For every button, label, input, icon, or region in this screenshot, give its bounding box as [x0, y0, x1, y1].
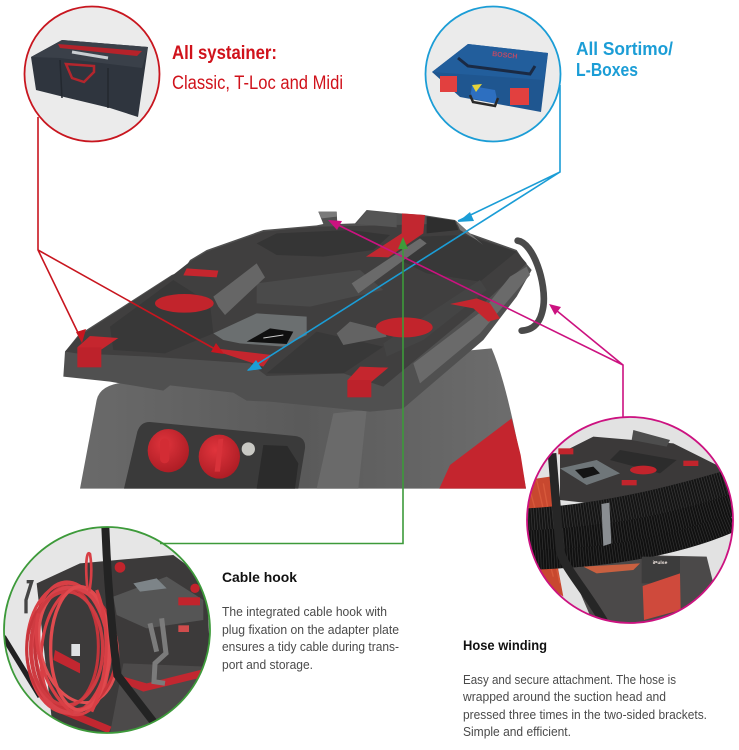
connector: green line and arrow: [160, 237, 408, 544]
cable hook tab: [318, 212, 337, 218]
black handle: [552, 453, 605, 623]
hose bracket: [518, 241, 544, 331]
heading: All systainer: [172, 43, 343, 94]
control panel: [124, 422, 305, 489]
heading: All systainer: Classic, T-Loc and Midi: [172, 73, 343, 94]
red lock: front right: [347, 367, 388, 397]
connector: red lines and arrows: [38, 117, 224, 354]
icon: blue L-Boxx case: BOSCH: [492, 51, 518, 61]
connector: magenta lines and arrows: [328, 220, 623, 417]
vacuum body: [80, 348, 526, 489]
text block: Cable hook: Cable hook: [222, 569, 297, 585]
text block: Hose winding: Easy and secure attachment. The hose is: [463, 672, 676, 687]
text block: Hose winding: wrapped around the suction head and: [462, 689, 666, 704]
corrugated hose: [523, 482, 733, 560]
red side panel: [439, 418, 526, 489]
circle: L-Boxx: [426, 6, 560, 142]
heading: All Sortimo/L-Boxes: L-Boxes: [576, 60, 638, 80]
circle: hose winding: [523, 417, 733, 623]
text block: Hose winding: Hose winding: [463, 637, 547, 653]
black handle: [105, 527, 153, 722]
heading: All Sortimo/L-Boxes: [576, 39, 673, 80]
connector: blue lines and arrows: [247, 85, 560, 371]
product: vacuum with adapter plate: [63, 210, 544, 489]
text block: Cable hook: ensures a tidy cable during trans-: [222, 639, 399, 654]
rotary knob right: [199, 435, 240, 479]
central opening: [213, 313, 307, 347]
red lock: back centre: [366, 213, 425, 257]
red lock: front left: [77, 336, 118, 367]
gray bracket: [601, 503, 611, 546]
power socket: [257, 445, 298, 489]
text block: Hose winding: [462, 637, 707, 739]
red cable coil: [27, 553, 128, 718]
service label: [642, 557, 680, 583]
text block: Cable hook: port and storage.: [222, 657, 313, 672]
text block: Hose winding: Simple and efficient.: [463, 724, 571, 739]
raised ridges: [213, 263, 265, 315]
heading: All systainer: All systainer:: [172, 43, 277, 64]
circle: systainer: [24, 6, 160, 142]
photo: hose wound around vacuum: iPulse: [653, 560, 668, 566]
red service flap: [643, 573, 681, 620]
adapter plate: [63, 210, 544, 412]
red lock: right: [450, 298, 500, 322]
gray cable bracket: [150, 618, 166, 683]
text block: Cable hook: plug fixation on the adapter plate: [222, 622, 399, 637]
photo: cable coiled on hook: [3, 527, 213, 733]
red lock: back left: [183, 268, 218, 277]
rotary knob left: [148, 429, 189, 472]
icon: systainer case: [31, 40, 148, 117]
text block: Cable hook: [222, 569, 399, 672]
red dial: right: [376, 317, 433, 337]
circle: cable hook: [3, 527, 213, 733]
heading: All Sortimo/L-Boxes: All Sortimo/: [576, 39, 673, 59]
red dial: left: [155, 294, 214, 313]
text block: Hose winding: pressed three times in the two-sided brackets.: [463, 707, 707, 722]
indicator lamp: [242, 442, 255, 456]
photo: hose wound around vacuum: [523, 430, 733, 623]
text block: Cable hook: The integrated cable hook with: [222, 604, 387, 619]
back tabs: [357, 211, 397, 227]
red lock: front centre: [215, 348, 272, 367]
